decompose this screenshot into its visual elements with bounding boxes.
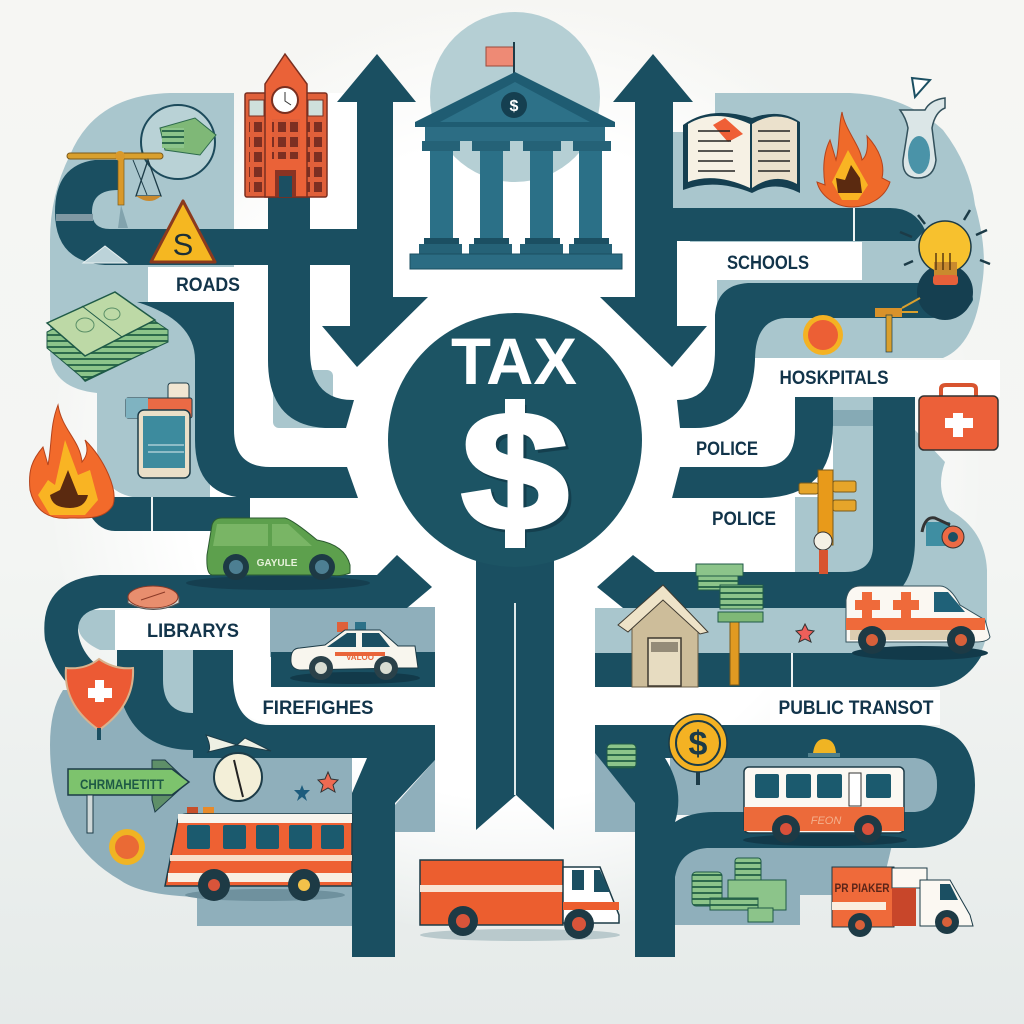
icon: clock with wings — [206, 735, 271, 801]
label: schools: SCHOOLS — [727, 253, 809, 274]
panel: lower left light area — [50, 607, 435, 926]
label: public transport: PUBLIC TRANSOT — [778, 698, 934, 719]
icon: clock tower building — [245, 54, 327, 197]
road: lower left C curve — [44, 555, 432, 712]
icon: fire truck center — [420, 860, 620, 941]
platform — [410, 254, 622, 269]
icon: ticket device — [126, 383, 192, 478]
icon: open book — [683, 113, 800, 193]
icon: warning triangle with dollar: S — [173, 227, 193, 262]
icon: coin disc — [128, 586, 179, 610]
icon: orange badge top — [803, 315, 843, 355]
thin road lines — [152, 208, 854, 687]
road: right vertical to arrow end — [597, 397, 915, 608]
road: car strip — [271, 652, 435, 687]
icon: dollar coin sign — [669, 714, 727, 785]
icon: fire right — [817, 112, 890, 207]
icon: green car: GAYULE — [257, 558, 298, 569]
icon: road sign — [68, 760, 189, 833]
panel: lower right light area — [595, 730, 937, 925]
icon: yellow badge — [109, 829, 145, 865]
tax circle medallion — [365, 290, 665, 830]
road: right S curve — [677, 283, 973, 428]
icon: small truck PR PIAKER: PR PIAKER — [834, 881, 890, 895]
icon: small money roll — [607, 744, 636, 768]
road: house strip — [595, 653, 983, 687]
road: firefighters vertical — [193, 650, 435, 957]
icon: house — [618, 585, 708, 687]
label: roads: ROADS — [176, 275, 240, 296]
panel: upper left light area — [50, 93, 357, 498]
icon: helmet — [808, 739, 840, 757]
icon: scales of justice with money — [67, 105, 216, 228]
icon: shield — [66, 659, 133, 740]
panel: upper right light area — [595, 93, 987, 660]
icon: warning triangle with dollar — [151, 201, 215, 262]
circle — [388, 313, 642, 567]
icon: money stack — [47, 292, 168, 382]
icon: small star — [796, 624, 814, 642]
icon: police car — [290, 622, 420, 684]
road: lower left branch — [117, 650, 193, 750]
heading: TAX: TAX — [451, 324, 577, 398]
icon: public bus: FEON — [811, 815, 841, 827]
icon: fire bus — [165, 807, 352, 901]
road: from clock tower — [268, 190, 354, 428]
icon: ambulance — [846, 586, 990, 660]
icon: flask — [900, 78, 945, 178]
dollar sign: $ — [462, 378, 568, 565]
road: lower curved left — [137, 302, 358, 498]
icon: road mound — [83, 246, 127, 263]
road: upper left loop — [55, 160, 357, 265]
panel: central light circle behind government building — [430, 12, 600, 182]
icon: police car: VALOO — [346, 653, 374, 662]
road: fire base — [90, 497, 250, 531]
icon: fire left — [30, 405, 114, 518]
icon: small truck PR PIAKER — [832, 867, 973, 937]
icon: money signpost — [696, 564, 763, 685]
label: police upper: POLICE — [696, 439, 758, 460]
icon: tool device — [922, 518, 964, 548]
icon: traffic light — [799, 470, 856, 574]
icon: stars — [294, 772, 338, 801]
road: police bend — [672, 397, 833, 498]
white road bands — [115, 93, 1000, 725]
icon: road stripes — [56, 214, 93, 221]
ribbon — [476, 540, 554, 830]
icon: green cash piles — [692, 858, 786, 922]
flag — [486, 47, 514, 66]
arrow: left double-headed — [300, 54, 428, 367]
labels — [147, 253, 934, 719]
label: hospitals: HOSKPITALS — [780, 368, 888, 389]
icon: road sign: CHRMAHETITT — [80, 776, 164, 792]
white ring — [365, 290, 665, 590]
dollar sign: $ — [465, 381, 571, 568]
icon: public bus — [743, 767, 907, 846]
icon: hammer — [875, 298, 920, 352]
road: public transit loop — [595, 725, 975, 957]
label: firefighters: FIREFIGHES — [262, 698, 374, 719]
icon: medical kit — [919, 385, 998, 450]
label: police lower: POLICE — [712, 509, 776, 530]
icon: dollar coin sign: $ — [689, 725, 708, 763]
arrow: right double-headed — [600, 54, 925, 367]
columns — [419, 141, 612, 254]
icon: green car — [186, 518, 370, 590]
icon: government building: $ — [510, 98, 519, 115]
icon: light bulb — [900, 210, 990, 285]
icon: government building — [410, 42, 622, 269]
road: bulb shadow — [917, 264, 973, 320]
label: libraries: LIBRARYS — [147, 621, 239, 642]
pediment — [415, 72, 615, 127]
